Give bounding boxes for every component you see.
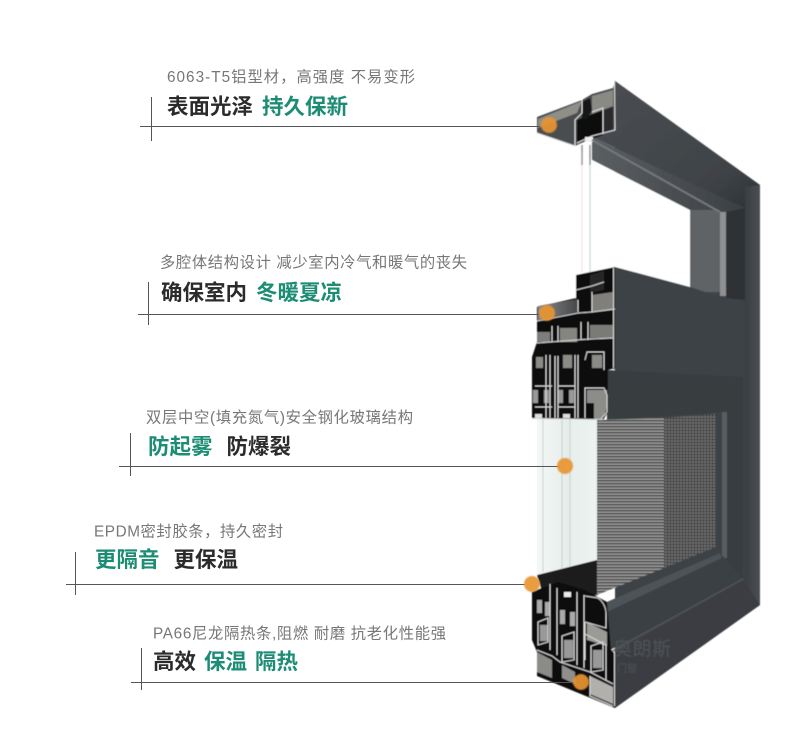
- heading 1: 表面光泽 持久保新: [167, 95, 348, 119]
- right outer jamb: [745, 185, 760, 605]
- callout 3: glass: [119, 408, 560, 476]
- lower sash rail: [607, 553, 743, 650]
- lower outer frame: [615, 580, 760, 708]
- leader line 2: [138, 282, 540, 325]
- insect mesh: [597, 414, 716, 595]
- glass panel: [537, 418, 597, 575]
- subtitle 2: 多腔体结构设计 减少室内冷气和暖气的丧失: [160, 254, 467, 272]
- leader line 3: [119, 433, 560, 476]
- head front face: [592, 81, 760, 208]
- middle section cut: [532, 267, 615, 420]
- heading 2: 确保室内 冬暖夏凉: [161, 280, 342, 305]
- head top section: [537, 81, 615, 146]
- subtitle 4: EPDM密封胶条，持久密封: [94, 524, 283, 540]
- heading 3: 防起雾 防爆裂: [148, 435, 291, 459]
- leader line 4: [66, 552, 525, 595]
- callout 5: thermal break: [131, 624, 575, 690]
- window opening: [537, 146, 690, 307]
- glazing channel below glass: [537, 560, 597, 600]
- heading 5: 高效 保温 隔热: [153, 649, 299, 674]
- orange marker dots: [524, 117, 589, 690]
- glass edge lines in opening: [582, 145, 590, 272]
- subtitle 3: 双层中空(填充氮气)安全钢化玻璃结构: [146, 408, 413, 426]
- leader line 5: [131, 648, 575, 690]
- callout 4: seal: [66, 524, 525, 595]
- watermark: 奥朗斯: [613, 638, 671, 660]
- callout 1: surface finish: [140, 69, 540, 141]
- head underside: [592, 137, 742, 300]
- watermark: [613, 638, 671, 675]
- lower section cut: [532, 582, 615, 708]
- heading 4: 更隔音 更保温: [95, 547, 238, 572]
- window frame illustration: [532, 81, 760, 708]
- subtitle 5: PA66尼龙隔热条,阻燃 耐磨 抗老化性能强: [153, 624, 446, 642]
- frame silhouette: [615, 81, 760, 708]
- recessed inner jamb: [592, 140, 745, 300]
- sash inner frame: [607, 370, 743, 580]
- subtitle 1: 6063-T5铝型材，高强度 不易变形: [167, 69, 415, 86]
- watermark: 门窗: [617, 662, 637, 675]
- leader line 1: [140, 97, 540, 141]
- middle rail face: [613, 267, 745, 377]
- callout 2: insulation: [138, 254, 540, 325]
